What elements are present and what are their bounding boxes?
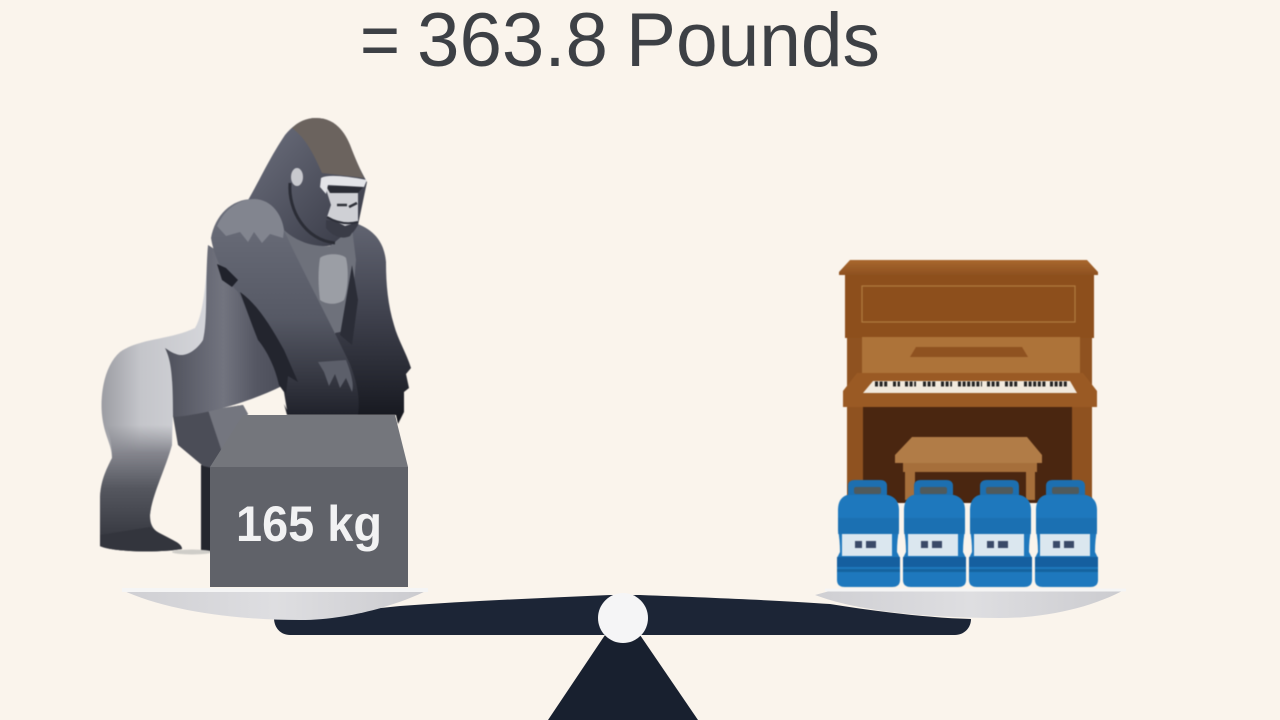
bench legs <box>905 472 1035 500</box>
black keys <box>875 382 1068 386</box>
front board <box>862 337 1080 373</box>
lid <box>839 260 1098 275</box>
lower cavity <box>863 407 1072 503</box>
bottle 2 <box>903 480 966 587</box>
right arm <box>330 222 411 424</box>
left pan rim <box>122 588 428 592</box>
weight box <box>210 415 408 587</box>
head and neck <box>245 118 367 247</box>
back leg <box>201 465 211 552</box>
rump and rear leg <box>100 248 235 551</box>
muzzle <box>325 186 358 226</box>
piano <box>839 260 1098 503</box>
chest plate <box>318 254 348 304</box>
forearm shadow <box>240 292 298 394</box>
lower leg shading <box>100 425 182 551</box>
ear <box>291 168 303 186</box>
bottle 3 <box>969 480 1032 587</box>
pivot <box>598 593 648 643</box>
value: 363.8 <box>417 0 608 83</box>
box top <box>210 415 408 467</box>
upper cabinet <box>845 272 1094 338</box>
beam <box>274 595 971 635</box>
gorilla <box>100 118 411 554</box>
box front <box>210 467 408 587</box>
inner thigh <box>173 405 248 468</box>
bottle 1 <box>837 480 900 587</box>
inner chest shadow <box>340 265 358 345</box>
right pan <box>815 589 1126 618</box>
unit: Pounds <box>626 0 880 83</box>
mouth <box>327 217 358 223</box>
bench <box>895 437 1042 500</box>
balance scale <box>122 589 1126 720</box>
chest <box>284 228 356 340</box>
stand <box>548 635 698 720</box>
bench seat <box>895 437 1042 463</box>
inner thigh highlight <box>208 405 248 452</box>
lower cabinet <box>847 338 1092 503</box>
right pan rim <box>825 588 1126 592</box>
brown crown <box>292 118 364 178</box>
bottle 4 <box>1035 480 1098 587</box>
front arm <box>211 199 359 415</box>
jaw line <box>290 183 335 243</box>
title <box>360 0 880 83</box>
music rest <box>910 347 1028 357</box>
eye shadow <box>326 186 364 193</box>
torso and hip <box>165 245 295 417</box>
water bottles <box>837 480 1098 587</box>
forearm highlight <box>318 360 353 392</box>
shoulder highlight <box>217 199 284 243</box>
left pan <box>122 590 428 620</box>
weight label: 165 kg <box>236 496 382 552</box>
chin <box>326 220 358 238</box>
foot <box>100 527 182 551</box>
panel inlay <box>862 286 1075 322</box>
foot shadow <box>172 550 212 554</box>
brow <box>320 176 367 194</box>
key slip <box>843 373 1097 407</box>
nose <box>337 203 357 207</box>
arm dark notch <box>217 264 238 287</box>
equals sign: = <box>360 0 400 83</box>
white keys <box>863 381 1077 393</box>
bench apron <box>903 463 1037 472</box>
